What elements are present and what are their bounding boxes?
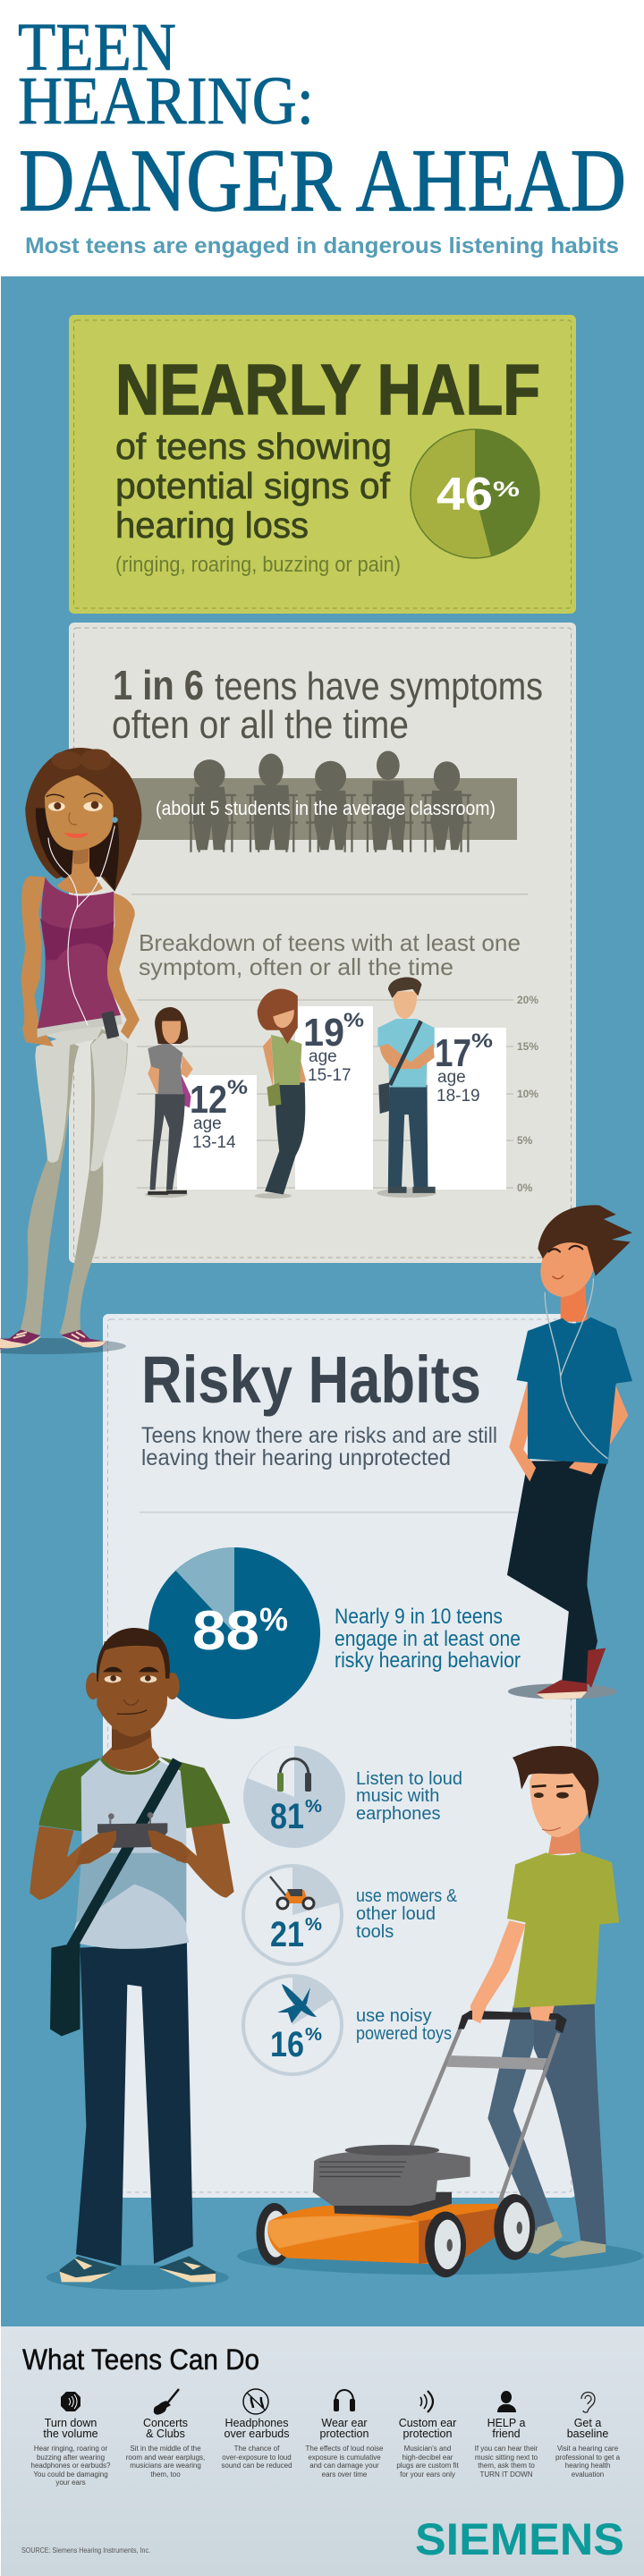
icon: volume stop sign xyxy=(61,2392,80,2411)
character: boy pushing lawn mower xyxy=(237,1746,643,2277)
stat: 16 percent toys: 16 xyxy=(270,2025,304,2064)
tip: turn down the volume: your ears xyxy=(55,2479,86,2487)
tip: concerts and clubs: Concerts xyxy=(143,2417,188,2429)
heading: 1 in 6: often or all the time xyxy=(112,703,409,747)
text: use mowers: use mowers & xyxy=(356,1886,458,1906)
icon: guitar xyxy=(154,2389,179,2415)
stat: 16 percent toys: % xyxy=(305,2025,322,2045)
pie chart: 46 percent xyxy=(411,429,539,558)
panel: nearly half xyxy=(69,315,576,614)
icon: person xyxy=(497,2391,516,2412)
tip: get a baseline: Get a xyxy=(574,2417,601,2429)
tip: turn down the volume: the volume xyxy=(43,2428,98,2440)
text: use noisy toys xyxy=(356,2006,452,2044)
pie chart: 46 percent: 46 xyxy=(436,469,493,521)
shadow under girl xyxy=(0,1338,126,1354)
girl legs xyxy=(0,1026,128,1349)
pie chart: 46 percent: % xyxy=(493,478,520,502)
text: symptoms list: (ringing, roaring, buzzing or pain) xyxy=(115,553,401,577)
title: HEARING: xyxy=(18,64,314,139)
tip: concerts and clubs xyxy=(126,2389,205,2479)
tip: help a friend: them, ask them to xyxy=(478,2462,535,2470)
bar label: 12 percent: 12 xyxy=(190,1078,227,1122)
bar chart: symptoms by age xyxy=(137,978,538,1199)
bar label: 19 percent: 19 xyxy=(303,1011,344,1055)
chart axis labels xyxy=(517,994,538,1194)
blue background panel xyxy=(1,276,644,2326)
tip: get a baseline: hearing health xyxy=(565,2462,610,2470)
text: nearly 9 in 10: risky hearing behavior xyxy=(335,1648,521,1673)
tip: headphones over earbuds: over earbuds xyxy=(225,2428,289,2440)
tip: custom ear protection xyxy=(396,2391,459,2479)
text: use mowers xyxy=(356,1886,458,1942)
text: risky habits intro xyxy=(141,1423,497,1470)
bar label: 19 percent xyxy=(303,1009,364,1085)
tip: concerts and clubs: & Clubs xyxy=(146,2428,185,2440)
tip: concerts and clubs: them, too xyxy=(150,2470,181,2479)
text: signs of hearing loss: potential signs of xyxy=(115,465,391,506)
bar label: 19 percent: age xyxy=(309,1047,337,1066)
tip: headphones over earbuds: Headphones xyxy=(225,2417,288,2429)
tip: custom ear protection: Custom ear xyxy=(399,2417,456,2429)
character: boy in blue shirt xyxy=(507,1205,632,1699)
tip: headphones over earbuds: sound can be reduced xyxy=(221,2462,292,2470)
tip: custom ear protection: plugs are custom fit xyxy=(396,2462,459,2470)
chart axis labels: 5% xyxy=(517,1134,533,1147)
icon: ear xyxy=(581,2392,595,2412)
text: nearly 9 in 10: engage in at least one xyxy=(335,1627,521,1651)
tip: wear ear protection xyxy=(305,2390,384,2479)
icon: no earbuds xyxy=(243,2389,268,2414)
panel: 1 in 6 xyxy=(69,623,576,1263)
title xyxy=(18,10,626,230)
tip: wear ear protection: and can damage your xyxy=(309,2462,379,2470)
tip: custom ear protection: for your ears only xyxy=(400,2470,455,2479)
stat: 21 percent mowers: 21 xyxy=(270,1915,304,1954)
text: nearly 9 in 10: Nearly 9 in 10 teens xyxy=(335,1605,503,1629)
text: nearly 9 in 10 xyxy=(335,1605,521,1673)
pie chart: 88 percent: 88 xyxy=(192,1600,259,1662)
boy lower body xyxy=(47,1942,229,2290)
chart axis labels: 10% xyxy=(517,1088,538,1100)
tip: help a friend: TURN IT DOWN xyxy=(480,2470,533,2479)
bar label: 17 percent: 17 xyxy=(435,1031,471,1075)
tip: help a friend: If you can hear their xyxy=(475,2445,538,2453)
icon: ear muffs xyxy=(334,2390,355,2411)
banner xyxy=(131,778,517,840)
bar label: 17 percent: % xyxy=(471,1030,493,1052)
text: use noisy toys: use noisy xyxy=(356,2006,431,2026)
tip: turn down the volume: You could be damaging xyxy=(33,2470,108,2479)
icon: toy plane xyxy=(277,1984,317,2023)
heading: what teens can do: What Teens Can Do xyxy=(22,2343,259,2376)
panel: risky habits xyxy=(103,1314,576,2198)
tip: get a baseline xyxy=(555,2392,621,2479)
bar label: 12 percent: 13-14 xyxy=(192,1133,236,1152)
chart axis labels: 0% xyxy=(517,1182,533,1194)
text: breakdown heading: symptom, often or all the time xyxy=(139,953,453,980)
stat: 81 percent earphones: 81 xyxy=(270,1797,304,1836)
logo: Siemens: SIEMENS xyxy=(415,2514,624,2564)
text: risky habits intro: Teens know there are risks and are still xyxy=(141,1423,497,1448)
source note: SOURCE: Siemens Hearing Instruments, Inc. xyxy=(21,2546,150,2555)
heading: nearly half: NEARLY HALF xyxy=(115,350,540,429)
girl upper body xyxy=(21,748,141,1046)
tip: turn down the volume: headphones or earbuds? xyxy=(31,2462,111,2470)
icon: sound waves xyxy=(420,2391,433,2412)
text: breakdown heading: Breakdown of teens with at least one xyxy=(139,929,521,956)
icon: headphones xyxy=(277,1758,311,1792)
tip: custom ear protection: high-decibel ear xyxy=(402,2453,453,2462)
heading: 1 in 6: 1 in 6 xyxy=(113,662,204,708)
title: TEEN xyxy=(18,10,176,85)
text: use mowers: tools xyxy=(356,1922,394,1942)
stat: 21 percent mowers xyxy=(243,1866,342,1964)
tip: help a friend: HELP a xyxy=(487,2417,525,2429)
text: use mowers: other loud xyxy=(356,1904,436,1924)
stat: 81 percent earphones: % xyxy=(305,1797,322,1817)
heading: 1 in 6 xyxy=(112,662,543,747)
tip: help a friend: music sitting next to xyxy=(475,2453,538,2462)
text: signs of hearing loss: of teens showing xyxy=(115,426,392,467)
tip: get a baseline: baseline xyxy=(567,2428,608,2440)
bar label: 19 percent: % xyxy=(343,1009,364,1031)
tip: wear ear protection: The effects of loud noise xyxy=(305,2445,384,2453)
tip: get a baseline: professional to get a xyxy=(555,2453,621,2462)
pie chart: 88 percent xyxy=(148,1547,320,1719)
text: breakdown heading xyxy=(139,929,521,980)
tip: custom ear protection: protection xyxy=(403,2428,452,2440)
tip: help a friend: friend xyxy=(492,2428,521,2440)
bar label: 19 percent: 15-17 xyxy=(308,1066,352,1085)
tip: turn down the volume: Turn down xyxy=(45,2417,97,2429)
chart axis labels: 20% xyxy=(517,994,538,1006)
bar label: 17 percent: age xyxy=(437,1068,466,1087)
tip: headphones over earbuds xyxy=(221,2389,292,2470)
tip: wear ear protection: protection xyxy=(320,2428,369,2440)
text: listen to loud music xyxy=(356,1769,462,1824)
text: signs of hearing loss xyxy=(115,426,392,546)
tip: get a baseline: Visit a hearing care xyxy=(557,2445,619,2453)
tip: help a friend xyxy=(475,2391,538,2479)
tip: headphones over earbuds: The chance of xyxy=(234,2445,280,2453)
bars xyxy=(177,1006,506,1190)
bar label: 17 percent xyxy=(435,1030,493,1106)
heading: risky habits: Risky Habits xyxy=(141,1343,481,1417)
tip: custom ear protection: Musician's and xyxy=(404,2445,451,2453)
bar label: 12 percent: age xyxy=(193,1114,222,1133)
tip: turn down the volume: buzzing after wearing xyxy=(37,2453,105,2462)
text: listen to loud music: earphones xyxy=(356,1804,441,1824)
character: girl with earphones xyxy=(0,748,141,1354)
subtitle: Most teens are engaged in dangerous listening habits xyxy=(25,233,619,258)
panel: what teens can do xyxy=(1,2326,644,2576)
heading: 1 in 6: teens have symptoms xyxy=(215,665,543,708)
bar label: 12 percent: % xyxy=(227,1076,248,1098)
stat: 16 percent toys xyxy=(243,1976,342,2074)
bar label: 17 percent: 18-19 xyxy=(436,1087,480,1106)
text: risky habits intro: leaving their hearing unprotected xyxy=(141,1445,451,1470)
tip: turn down the volume xyxy=(31,2392,111,2487)
tip: concerts and clubs: musicians are wearing xyxy=(130,2462,201,2470)
stat: 21 percent mowers: % xyxy=(305,1915,322,1935)
tip: get a baseline: evaluation xyxy=(572,2470,604,2479)
figures: three teens xyxy=(145,978,436,1199)
tip: concerts and clubs: Sit in the middle of the xyxy=(130,2445,201,2453)
icon: small mower xyxy=(270,1877,314,1909)
tip: concerts and clubs: room and wear earplugs, xyxy=(126,2453,205,2462)
bar label: 12 percent xyxy=(190,1076,248,1152)
text: listen to loud music: Listen to loud xyxy=(356,1769,462,1789)
text: listen to loud music: music with xyxy=(356,1786,439,1806)
text: use noisy toys: powered toys xyxy=(356,2024,452,2044)
icons: classroom silhouettes xyxy=(189,750,471,852)
tip: wear ear protection: exposure is cumulative xyxy=(308,2453,381,2462)
chart axis labels: 15% xyxy=(517,1040,538,1053)
tip: headphones over earbuds: over-exposure to loud xyxy=(222,2453,292,2462)
tip: turn down the volume: Hear ringing, roaring or xyxy=(34,2445,107,2453)
boy upper body xyxy=(30,1628,234,1949)
tip: wear ear protection: ears over time xyxy=(322,2470,368,2479)
text: classroom note: (about 5 students in the average classroom) xyxy=(156,797,496,819)
stat: 81 percent earphones xyxy=(243,1746,345,1848)
tip: wear ear protection: Wear ear xyxy=(321,2417,368,2429)
pie chart: 88 percent: % xyxy=(259,1601,288,1638)
character: boy with remote control xyxy=(30,1628,234,2290)
text: signs of hearing loss: hearing loss xyxy=(115,504,309,546)
